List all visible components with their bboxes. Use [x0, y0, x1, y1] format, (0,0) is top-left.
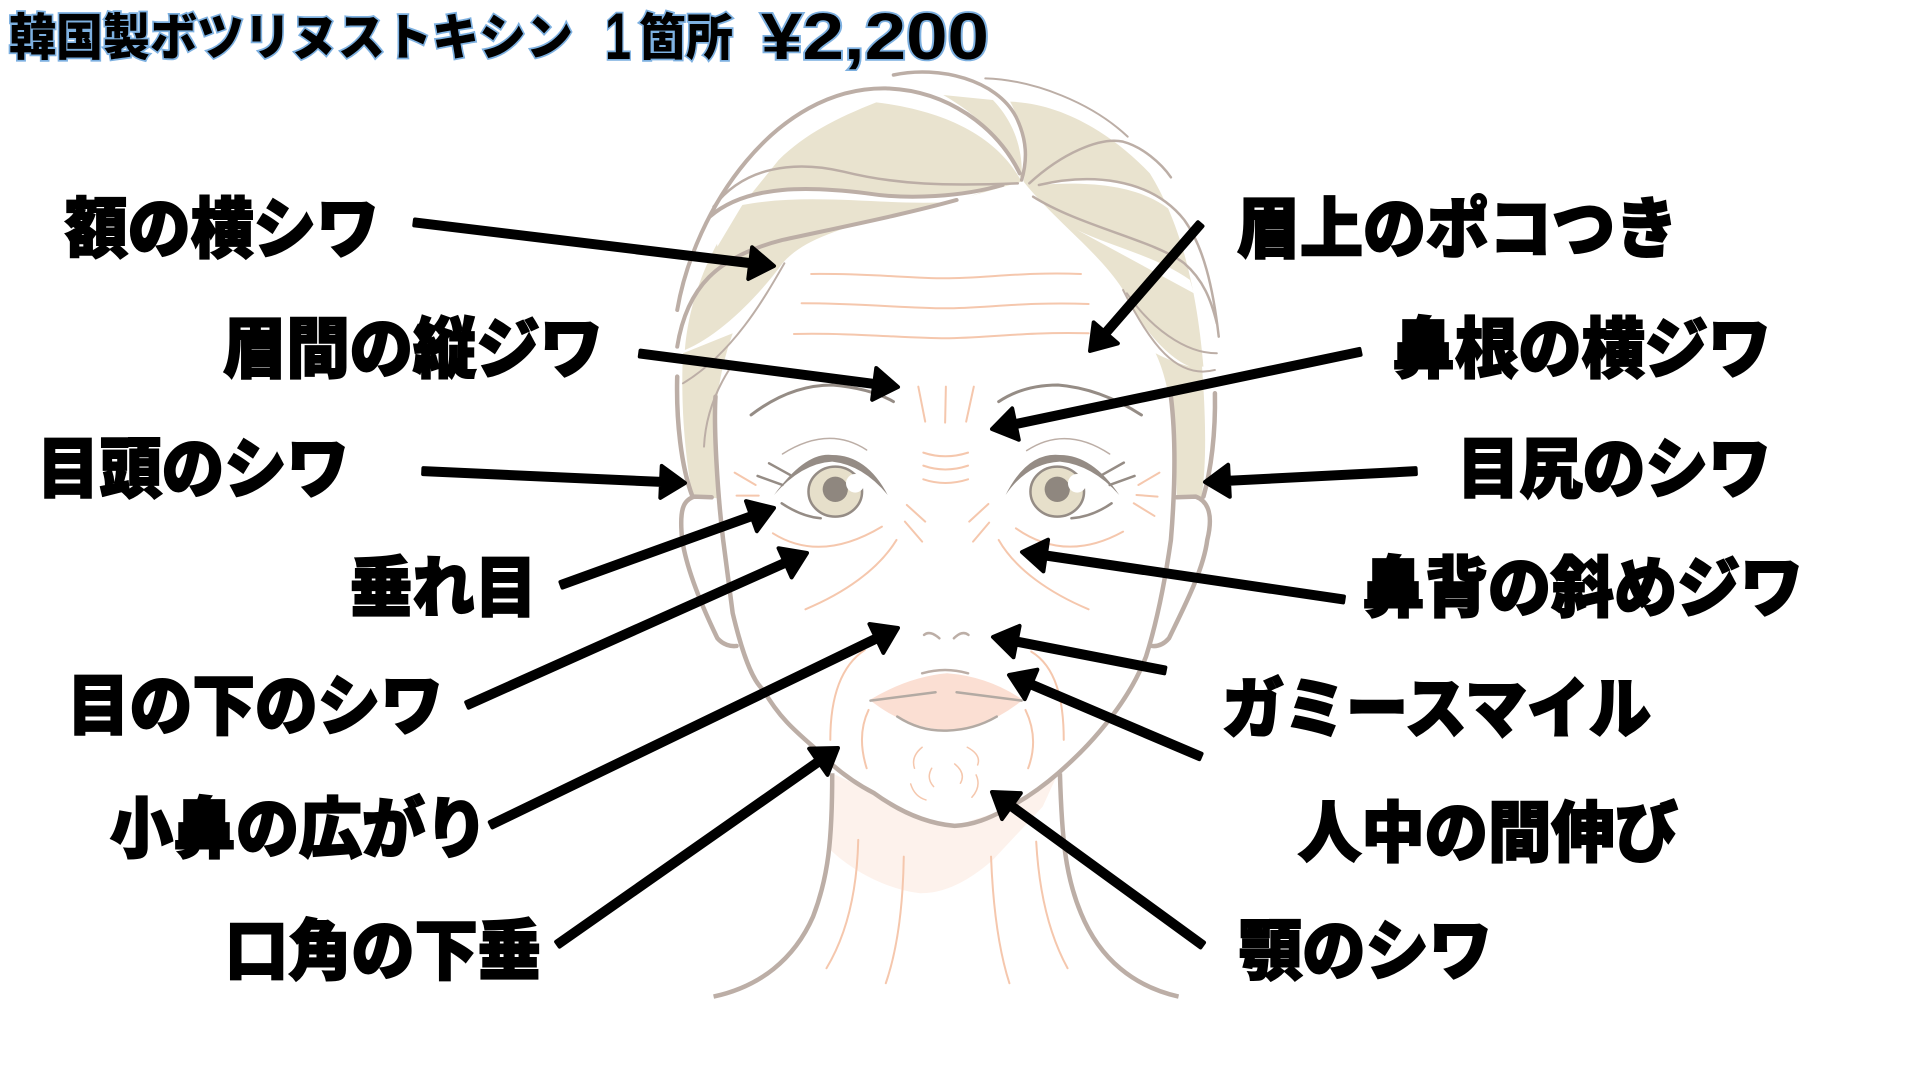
arrow: inner eye — [423, 455, 686, 499]
arrow: forehead — [413, 207, 776, 282]
title — [9, 0, 989, 73]
title: 1 — [605, 0, 631, 73]
labels: right column — [1222, 192, 1803, 988]
arrow: chin — [983, 779, 1212, 958]
labels: left column: 目の下のシワ — [67, 669, 443, 743]
labels: right column: 人中の間伸び — [1298, 796, 1678, 870]
ears and outer hair — [677, 377, 1215, 646]
labels: left column: 眉間の縦ジワ — [223, 312, 603, 386]
arrow: under eye — [461, 538, 814, 720]
labels: left column: 口角の下垂 — [225, 914, 541, 988]
labels: right column: ガミースマイル — [1222, 672, 1651, 746]
labels: right column: 鼻根の横ジワ — [1392, 312, 1771, 386]
neck shadow — [830, 773, 1058, 893]
labels: left column: 垂れ目 — [350, 551, 537, 625]
labels: right column: 眉上のポコつき — [1237, 192, 1678, 266]
lips — [870, 670, 1023, 731]
arrow: glabella — [638, 338, 900, 403]
title: 韓国製ボツリヌストキシン — [9, 10, 573, 66]
title: ¥2,200 — [761, 0, 989, 73]
arrows — [413, 207, 1417, 958]
hair strands — [677, 72, 1219, 447]
face outline — [715, 397, 1175, 826]
labels: left column: 小鼻の広がり — [110, 792, 488, 866]
arrow: nose bridge — [1020, 536, 1346, 615]
labels: left column: 額の横シワ — [65, 192, 379, 266]
chin wrinkles — [911, 747, 978, 800]
under-eye wrinkles — [773, 504, 1123, 547]
labels: left column — [37, 192, 603, 988]
arrow: above brow — [1078, 214, 1212, 361]
labels: right column: 顎のシワ — [1239, 914, 1492, 988]
arrow: nasal root — [989, 336, 1363, 445]
arrow: mouth corner — [549, 735, 847, 957]
eyebrows — [751, 385, 1141, 415]
left eye — [735, 438, 888, 518]
hair fill — [682, 95, 1205, 498]
labels: left column: 目頭のシワ — [37, 432, 349, 506]
forehead wrinkles — [794, 273, 1089, 483]
right eye — [1006, 439, 1159, 518]
cheek wrinkles — [805, 540, 1089, 768]
arrow: outer eye — [1204, 455, 1417, 498]
nose — [924, 633, 968, 638]
hair highlights — [714, 179, 1194, 293]
title: 箇所 — [639, 10, 733, 66]
illustration: aged face — [677, 72, 1219, 997]
arrow: nostril — [484, 614, 905, 839]
arrow: droopy eye — [556, 493, 779, 600]
labels: right column: 目尻のシワ — [1457, 432, 1771, 506]
neck wrinkles — [826, 840, 1068, 983]
arrow: gummy smile — [990, 621, 1168, 686]
neck outline — [714, 773, 1179, 997]
labels: right column: 鼻背の斜めジワ — [1362, 551, 1803, 625]
arrow: philtrum — [1003, 660, 1207, 771]
